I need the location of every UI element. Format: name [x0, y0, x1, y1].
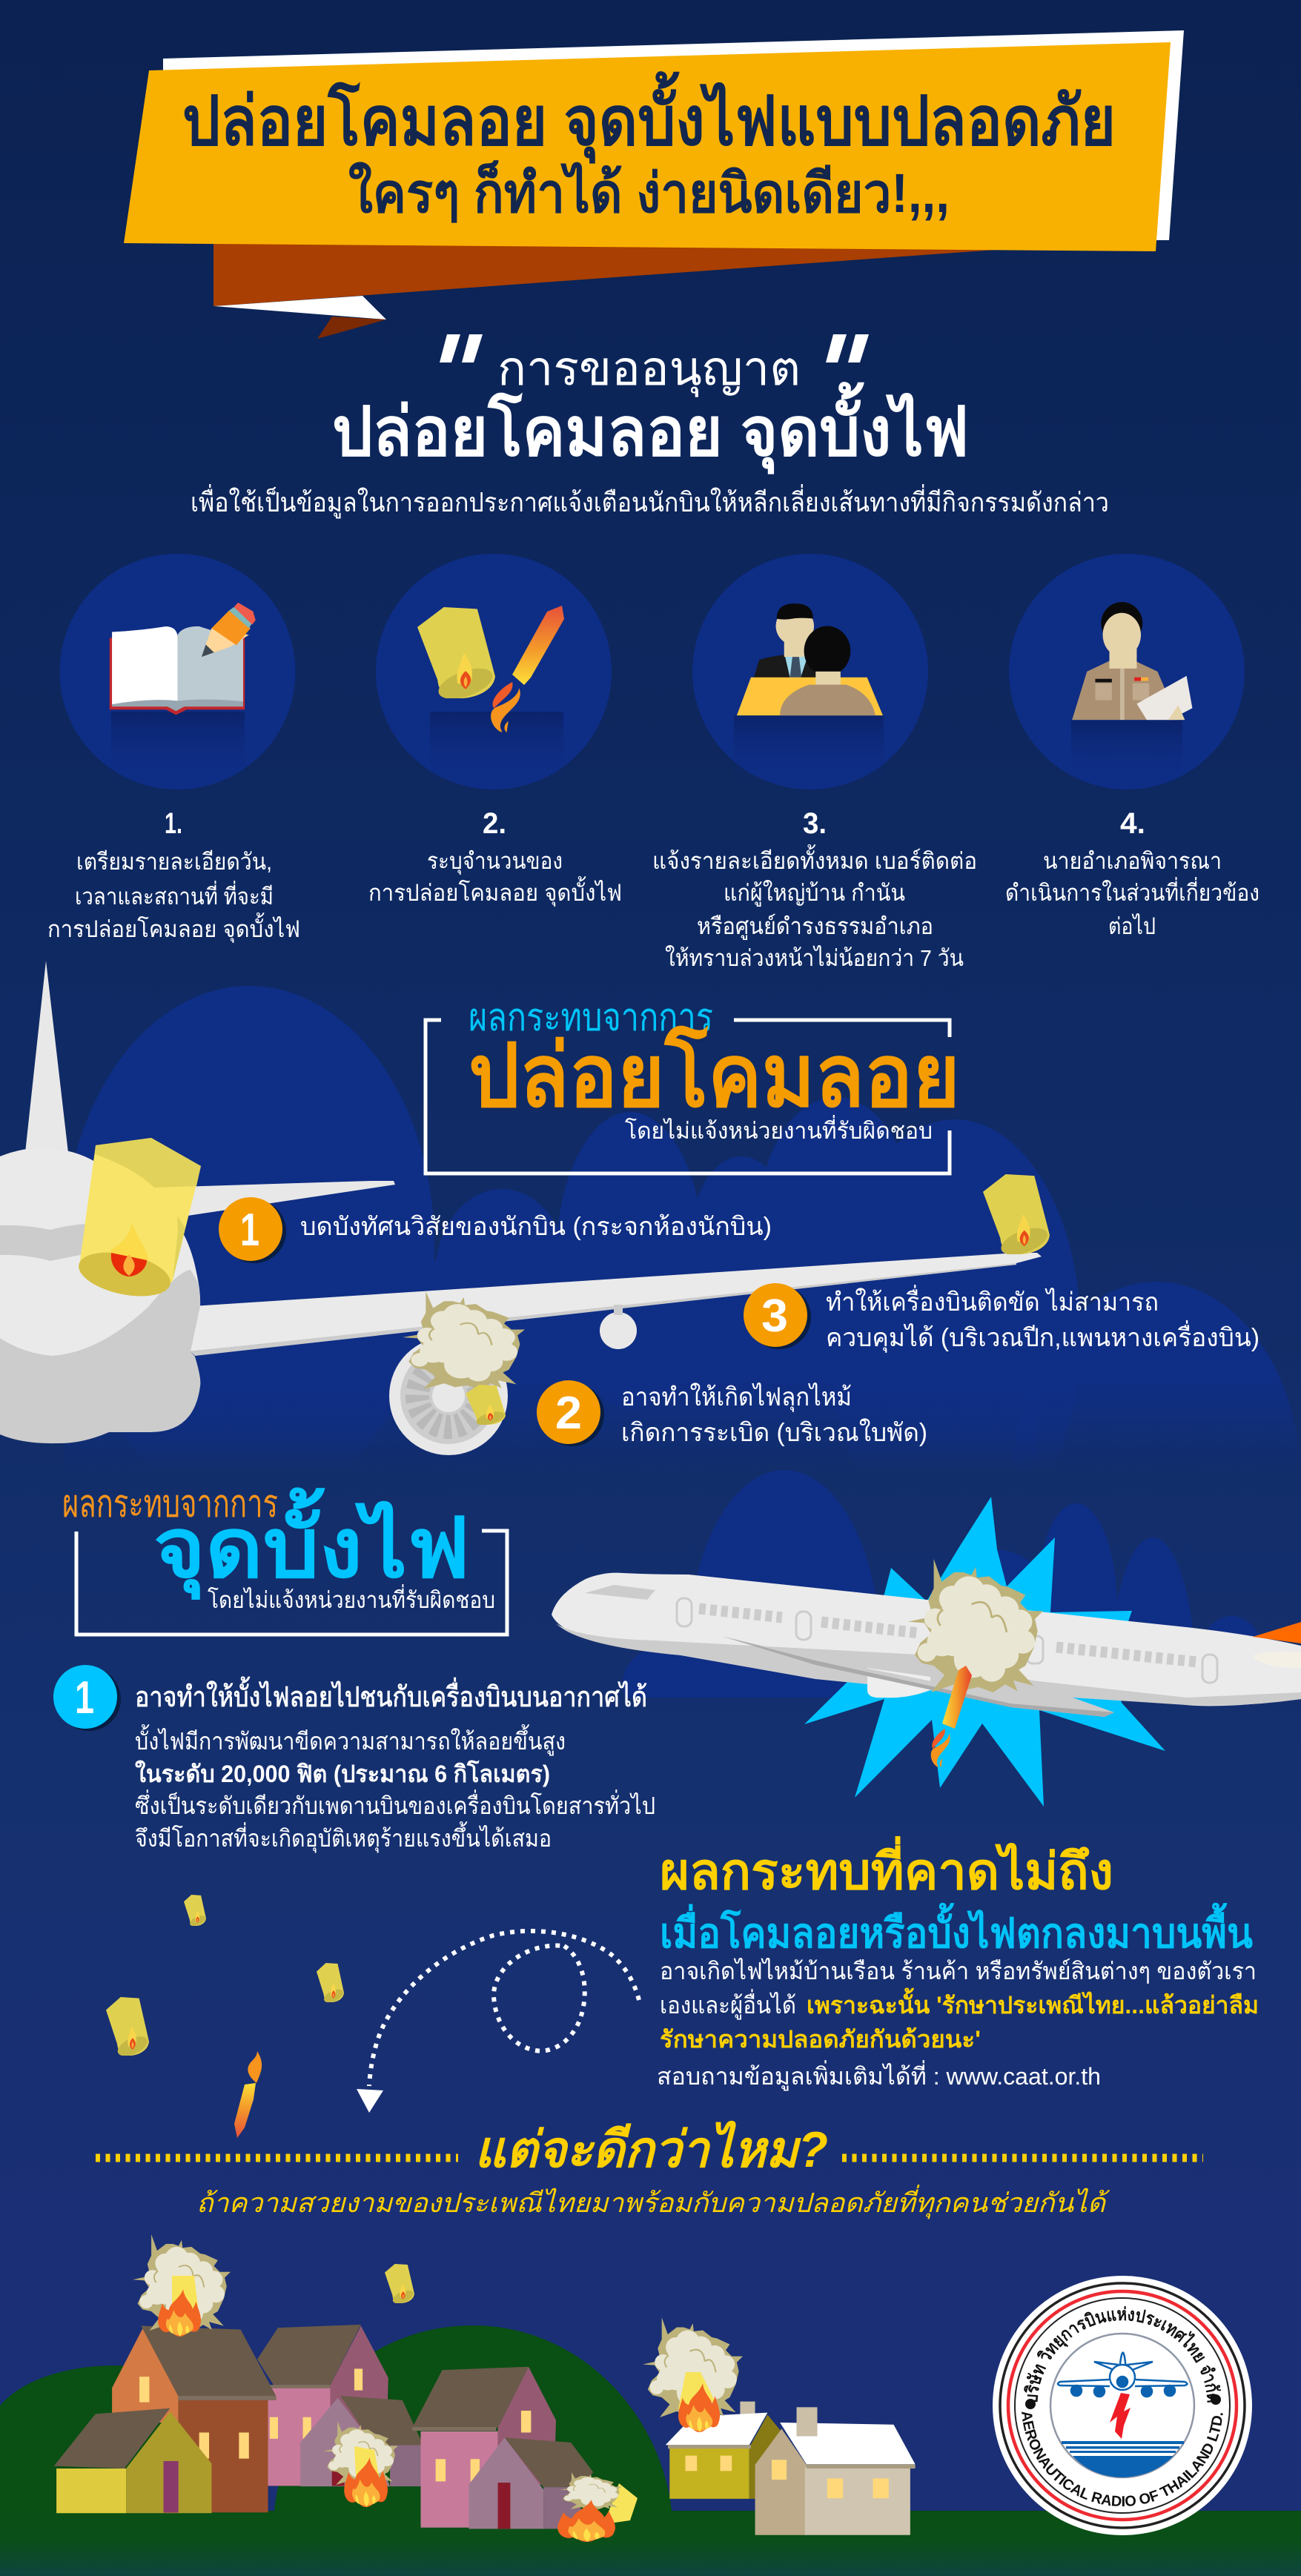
- step 2 text: [368, 848, 622, 907]
- rocket hitting plane: [942, 1666, 972, 1729]
- label: without notice: โดยไม่แจ้งหน่วยงานที่รับผิดชอบ: [625, 1115, 933, 1144]
- step 1 text: การปล่อยโคมลอย จุดบั้งไฟ: [47, 913, 300, 944]
- section heading: permission request: [191, 334, 1109, 519]
- impact body text: จึงมีโอกาสที่จะเกิดอุบัติเหตุร้ายแรงขึ้นได้เสมอ: [135, 1821, 552, 1853]
- impact 3 text: ทำให้เครื่องบินติดขัด ไม่สามารถ: [826, 1285, 1159, 1317]
- falling lanterns: [106, 1895, 344, 2060]
- step 1 text: เตรียมรายละเอียดวัน,: [76, 849, 272, 875]
- frame around heading: [76, 1531, 507, 1635]
- step 4 circle: [1009, 554, 1245, 789]
- label: without notice: โดยไม่แจ้งหน่วยงานที่รับผิดชอบ: [208, 1584, 495, 1613]
- impact body text: ซึ่งเป็นระดับเดียวกับเพดานบินของเครื่องบินโดยสารทั่วไป: [135, 1789, 655, 1819]
- step 1 circle: [59, 554, 295, 789]
- unexpected impact panel: [106, 1835, 1259, 2138]
- impact 1 badge: 1: [240, 1205, 259, 1256]
- step 3 text: แจ้งรายละเอียดทั้งหมด เบอร์ติดต่อ: [652, 844, 977, 874]
- heading: ผลกระทบที่คาดไม่ถึง: [660, 1835, 1113, 1900]
- body text: อาจเกิดไฟไหม้บ้านเรือน ร้านค้า หรือทรัพย์สินต่างๆ ของตัวเรา: [660, 1958, 1257, 1984]
- house: pink front: [412, 2367, 556, 2528]
- dashed flight path: [369, 1931, 639, 2086]
- label: impact from: ผลกระทบจากการ: [469, 996, 713, 1039]
- heading small: การขออนุญาต: [497, 342, 801, 397]
- house: mauve centre: [300, 2396, 423, 2486]
- step 1 panel: [47, 554, 300, 944]
- body text: สอบถามข้อมูลเพิ่มเติมได้ที่ : www.caat.or.th: [657, 2060, 1101, 2091]
- smoke and fire on house 4: [557, 2472, 638, 2542]
- heading large: ปล่อยโคมลอย จุดบั้งไฟ: [332, 382, 969, 474]
- clouds behind lantern section: [64, 986, 1301, 1683]
- airplane windows: [677, 1598, 1217, 1683]
- small sky lantern on wing tip: [983, 1174, 1050, 1260]
- step 1 number: 1.: [165, 807, 182, 840]
- step 3 text: แก่ผู้ใหญ่บ้าน กำนัน: [724, 880, 905, 907]
- step 4 panel: [1005, 554, 1259, 939]
- logo water: [1062, 2441, 1184, 2477]
- lantern in engine: [466, 1385, 506, 1428]
- house: orange and brown: [112, 2325, 277, 2512]
- airplane side view: [552, 1573, 1301, 1717]
- label: sky lantern: ปล่อยโคมลอย: [469, 1025, 960, 1125]
- title line 2: ใครๆ ก็ทำได้ ง่ายนิดเดียว!,,,: [348, 161, 950, 224]
- arrowhead: [357, 2089, 383, 2113]
- badge 1: 1: [75, 1672, 94, 1724]
- house: white roof mustard: [666, 2402, 784, 2499]
- turbine engine: [389, 1337, 508, 1455]
- step 2 circle: [376, 554, 612, 789]
- step 1 text: เวลาและสถานที่ ที่จะมี: [75, 881, 274, 910]
- impact 1 badge: [219, 1197, 286, 1263]
- title ribbon banner: [124, 30, 1184, 339]
- dotted line left: [96, 2154, 458, 2162]
- burning houses: [54, 2325, 916, 2535]
- label: rocket: จุดบั้งไฟ: [153, 1487, 470, 1600]
- smoke and fire on house 3: [323, 2421, 398, 2507]
- quote mark right: [826, 334, 869, 362]
- impact 2 text: [621, 1383, 927, 1447]
- subheading: เพื่อใช้เป็นข้อมูลในการออกประกาศแจ้งเตือนนักบินให้หลีกเลี่ยงเส้นทางที่มีกิจกรรมดังกล่าว: [191, 484, 1109, 519]
- logo lightning: [1110, 2393, 1130, 2439]
- subheading: เมื่อโคมลอยหรือบั้งไฟตกลงมาบนพื้น: [660, 1903, 1253, 1956]
- step 4 number: 4.: [1120, 807, 1145, 840]
- step 2 number: 2.: [483, 807, 506, 840]
- step 3 circle: [692, 554, 928, 789]
- impact body text: [135, 1724, 655, 1853]
- rocket impact panel: [53, 1483, 1301, 1853]
- impact 1 text: บดบังทัศนวิสัยของนักบิน (กระจกห้องนักบิน): [300, 1213, 772, 1241]
- closing question: [96, 2120, 1203, 2219]
- falling lantern over houses: [385, 2264, 414, 2306]
- impact 3 badge: [744, 1283, 811, 1349]
- impact 2 text: อาจทำให้เกิดไฟลุกไหม้: [621, 1383, 852, 1412]
- impact body text: บั้งไฟมีการพัฒนาขีดความสามารถให้ลอยขึ้นสูง: [135, 1724, 566, 1756]
- step 3 text: หรือศูนย์ดำรงธรรมอำเภอ: [697, 913, 933, 940]
- quote mark left: [440, 334, 483, 362]
- step 3 panel: [652, 554, 977, 971]
- icon: district officer with document: [1072, 602, 1192, 720]
- step 4 text: ดำเนินการในส่วนที่เกี่ยวข้อง: [1005, 877, 1259, 906]
- large sky lantern on cockpit: [75, 1138, 201, 1304]
- body text: เพราะฉะนั้น 'รักษาประเพณีไทย...แล้วอย่าลืม: [807, 1987, 1259, 2019]
- logo airplane: [1058, 2353, 1188, 2397]
- impact 2 text: เกิดการระเบิด (บริเวณใบพัด): [621, 1418, 927, 1447]
- step 2 text: ระบุจำนวนของ: [427, 848, 563, 875]
- company logo badge: [993, 2276, 1252, 2535]
- step 3 number: 3.: [803, 807, 827, 840]
- falling rocket: [234, 2051, 262, 2138]
- icon: two people at desk: [737, 603, 883, 715]
- icon: book and pencil: [110, 603, 256, 715]
- label: impact from: ผลกระทบจากการ: [62, 1483, 278, 1526]
- impact heading: อาจทำให้บั้งไฟลอยไปชนกับเครื่องบินบนอากาศได้: [135, 1676, 647, 1713]
- impact 3 text: [826, 1285, 1259, 1353]
- logo text English: AERONAUTICAL RADIO OF THAILAND LTD.: [1022, 2412, 1223, 2506]
- impact 2 badge: [537, 1380, 604, 1446]
- impact body text: ในระดับ 20,000 ฟิต (ประมาณ 6 กิโลเมตร): [135, 1760, 550, 1787]
- badge 1: [53, 1665, 121, 1731]
- step 4 text: [1005, 848, 1259, 939]
- step 3 text: [652, 844, 977, 971]
- rocket flame: [931, 1729, 950, 1767]
- step 4 text: นายอำเภอพิจารณา: [1043, 848, 1222, 874]
- smoke burst on fuselage: [908, 1559, 1043, 1692]
- step 1 text: [47, 849, 300, 944]
- house: mauve front: [469, 2437, 593, 2529]
- smoke and fire on house 1: [133, 2234, 231, 2337]
- impact 3 badge: 3: [761, 1291, 788, 1342]
- house: pink back: [257, 2325, 388, 2486]
- body text: เองและผู้อื่นได้: [660, 1989, 796, 2020]
- logo text Thai: บริษัท วิทยุการบินแห่งประเทศไทย จำกัด: [1024, 2306, 1222, 2403]
- dotted line right: [842, 2154, 1203, 2162]
- body text: รักษาความปลอดภัยกันด้วยนะ': [660, 2026, 981, 2053]
- clouds behind airplane: [623, 1470, 1259, 1698]
- smoke and fire on house 2: [643, 2317, 743, 2432]
- impact 3 text: ควบคุมได้ (บริเวณปีก,แพนหางเครื่องบิน): [826, 1320, 1259, 1353]
- impact 2 badge: 2: [555, 1388, 582, 1439]
- step 4 text: ต่อไป: [1108, 913, 1156, 939]
- house: yellow: [54, 2408, 211, 2513]
- house: white roof beige: [755, 2407, 916, 2535]
- frame around heading: [426, 1020, 950, 1173]
- ground and hills: [0, 2325, 1301, 2576]
- smoke burst on engine: [403, 1291, 525, 1389]
- airplane front view: [0, 961, 1042, 1443]
- cyan starburst: [804, 1497, 1165, 1807]
- step 2 text: การปล่อยโคมลอย จุดบั้งไฟ: [368, 876, 622, 907]
- question: แต่จะดีกว่าไหม?: [474, 2120, 828, 2178]
- body text: [657, 1958, 1259, 2091]
- step 3 text: ให้ทราบล่วงหน้าไม่น้อยกว่า 7 วัน: [665, 945, 964, 971]
- title line 1: ปล่อยโคมลอย จุดบั้งไฟแบบปลอดภัย: [182, 71, 1116, 164]
- step 2 panel: [368, 554, 622, 907]
- sky lantern impact panel: [0, 961, 1259, 1455]
- icon: lantern and rocket: [417, 606, 564, 732]
- question subtext: ถ้าความสวยงามของประเพณีไทยมาพร้อมกับความปลอดภัยที่ทุกคนช่วยกันได้: [196, 2184, 1110, 2219]
